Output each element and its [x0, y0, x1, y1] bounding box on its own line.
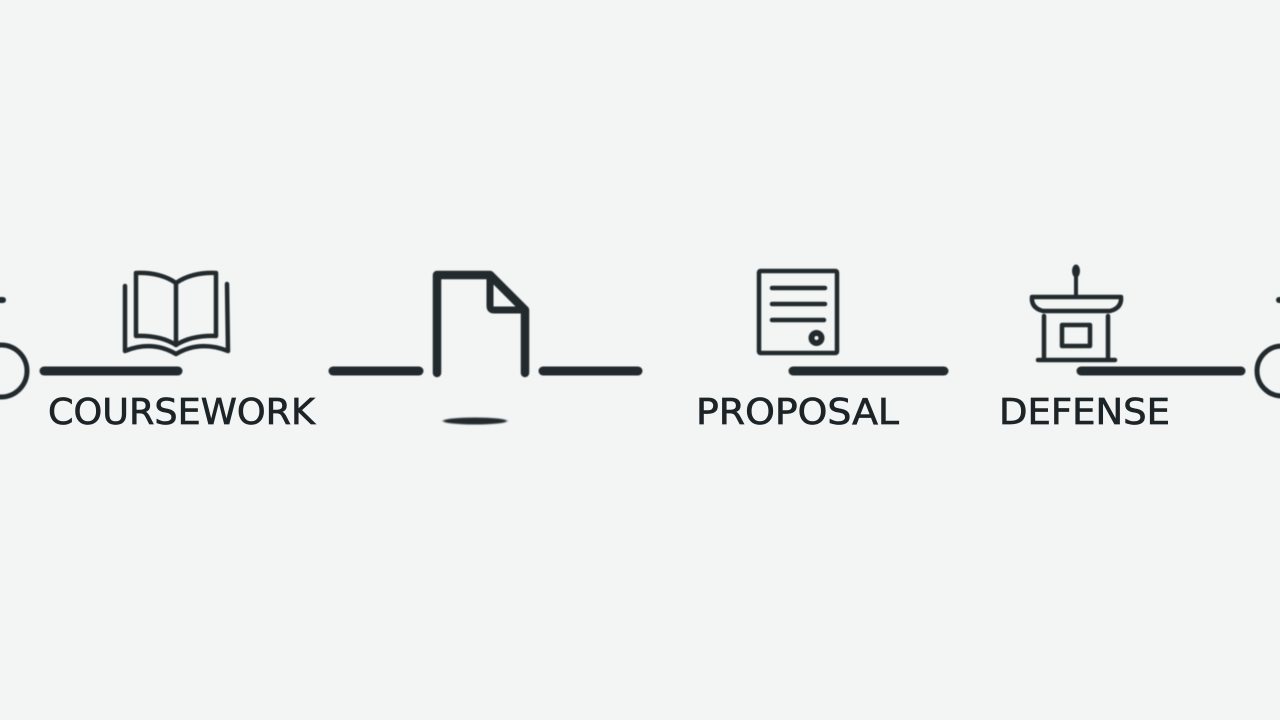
timeline segment: defense — [1081, 366, 1241, 376]
timeline — [0, 264, 1280, 397]
timeline segment: proposal — [793, 366, 944, 376]
icon: open book — [125, 273, 228, 354]
label: defense: DEFENSE — [999, 392, 1170, 433]
icon: proposal document with seal — [759, 271, 837, 353]
label: proposal: PROPOSAL — [696, 392, 899, 433]
timeline segment: coursework — [44, 366, 178, 376]
end node: right circle — [1257, 300, 1280, 396]
start node: left circle — [0, 300, 27, 397]
label: coursework: COURSEWORK — [48, 392, 316, 433]
timeline segment: before document — [333, 366, 419, 376]
icon: document — [437, 275, 525, 373]
timeline segment: after document — [543, 366, 638, 376]
icon: podium with microphone — [1032, 264, 1121, 360]
smudged missing label — [443, 418, 507, 424]
